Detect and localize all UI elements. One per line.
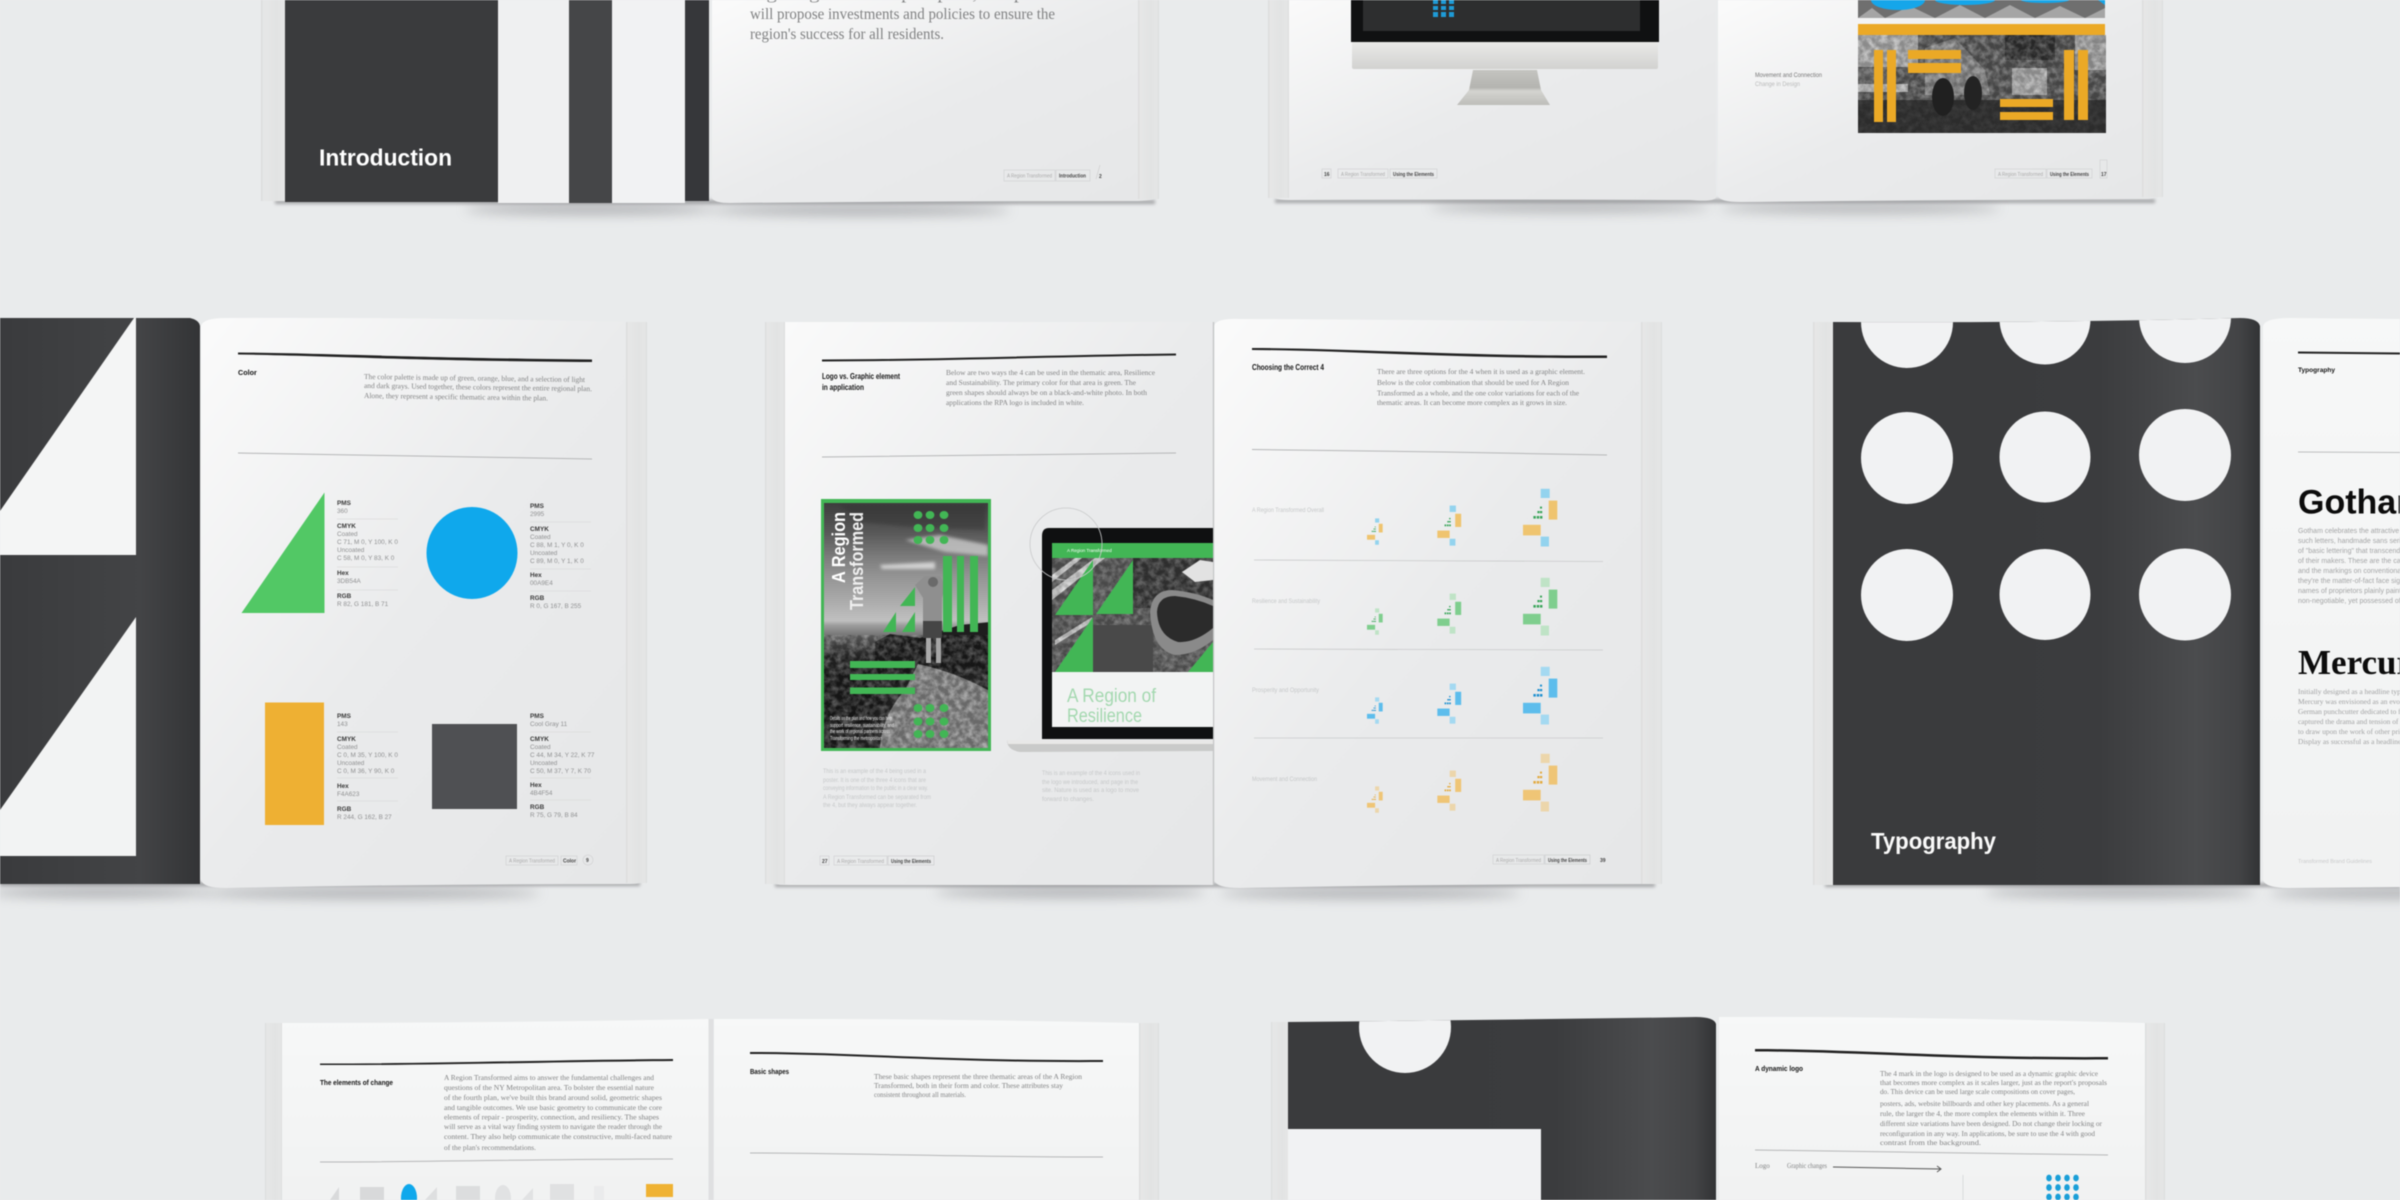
laptop caption bbox=[1042, 770, 1140, 803]
specs: blue: PMS bbox=[530, 503, 545, 510]
page footer bbox=[1004, 165, 1102, 181]
left heading bbox=[822, 372, 900, 392]
left header rule bbox=[822, 354, 1176, 362]
page footer: A Region Transformed bbox=[509, 858, 555, 864]
left page footer: Using the Elements bbox=[891, 859, 931, 865]
specs: green: C 71, M 0, Y 100, K 0 bbox=[337, 539, 398, 546]
specs: blue: Uncoated bbox=[530, 550, 558, 557]
screen title bbox=[1067, 686, 1157, 727]
left page edge bbox=[765, 322, 785, 884]
left heading: Logo vs. Graphic element bbox=[822, 372, 900, 381]
specs: green: Uncoated bbox=[337, 547, 365, 554]
spread: Color (middle left) bbox=[0, 318, 647, 898]
specs: gray: Hex bbox=[530, 782, 542, 789]
spine bbox=[708, 1019, 714, 1200]
specs: blue: R 0, G 167, B 255 bbox=[530, 603, 582, 610]
vertical rule bbox=[1962, 1175, 1964, 1200]
specs: blue: 00A9E4 bbox=[530, 580, 553, 587]
row: Prosperity and Opportunity: Prosperity and Opportunity bbox=[1252, 687, 1320, 694]
basic shapes body text: consistent throughout all materials. bbox=[874, 1090, 966, 1099]
laptop caption: This is an example of the 4 icons used in bbox=[1042, 770, 1140, 777]
heading: The elements of change: The elements of change bbox=[320, 1078, 393, 1087]
poster title: A Region bbox=[829, 512, 849, 583]
typography page content bbox=[2298, 352, 2400, 865]
shape row bbox=[330, 1184, 673, 1200]
specs: green: 360 bbox=[337, 508, 348, 515]
cover circle bbox=[1358, 1020, 1452, 1074]
left page bbox=[765, 322, 1213, 885]
introduction cover with stripes bbox=[285, 0, 709, 203]
poster small copy: support resilience, sustainability, and bbox=[830, 723, 894, 729]
specs: orange: C 0, M 36, Y 90, K 0 bbox=[337, 768, 395, 775]
right page bbox=[1719, 1017, 2165, 1200]
specs: gray: PMS bbox=[530, 713, 545, 720]
screen title: Resilience bbox=[1067, 706, 1142, 727]
poster caption bbox=[823, 768, 931, 809]
row: A Region Transformed Overall bbox=[1252, 489, 1557, 546]
spread: Using the elements (middle centre) bbox=[765, 319, 1662, 898]
laptop caption: the logo we introduced, and page in the bbox=[1042, 779, 1138, 786]
right intro text: Transformed as a whole, and the one color variations for each of the bbox=[1377, 388, 1580, 398]
dynamic logo body text: that becomes more complex as it scales larger, just as the report's proposals bbox=[1880, 1078, 2107, 1087]
page footers: A Region Transformed bbox=[1998, 172, 2043, 178]
right header rule bbox=[750, 1052, 1103, 1062]
specs: orange: Coated bbox=[337, 744, 358, 751]
page edge bbox=[1813, 322, 1835, 885]
intro text: and dark grays. Used together, these colors represent the entire regional plan. bbox=[364, 381, 592, 393]
logo callout circle bbox=[1030, 508, 1102, 580]
specs: orange: Uncoated bbox=[337, 760, 365, 767]
page footers: Using the Elements bbox=[2050, 172, 2089, 178]
specs: green: CMYK bbox=[337, 523, 356, 530]
elements body text: will serve as a vital way finding system to navigate the reader through the bbox=[444, 1122, 663, 1131]
spread: A dynamic logo (bottom right) bbox=[1271, 1016, 2165, 1200]
heading: Color: Color bbox=[238, 368, 257, 377]
right page edge bbox=[1139, 1023, 1159, 1200]
specs: green: C 58, M 0, Y 83, K 0 bbox=[337, 555, 395, 562]
spread: Using the elements, monitor and photo cards (top right) bbox=[1268, 0, 2163, 213]
right page edge bbox=[2145, 1023, 2165, 1200]
poster small copy bbox=[830, 716, 894, 742]
typography page bbox=[2263, 318, 2400, 888]
specs: gray: R 75, G 79, B 84 bbox=[530, 812, 578, 819]
page footers bbox=[1322, 160, 2107, 178]
cover white block bbox=[1288, 1129, 1541, 1200]
spread: Typography (middle right) bbox=[1813, 271, 2400, 898]
dark cover with white triangles bbox=[0, 318, 200, 884]
left intro text: Below are two ways the 4 can be used in the thematic area, Resilience bbox=[946, 368, 1156, 377]
right intro text: thematic areas. It can become more complex as it grows in size. bbox=[1377, 398, 1567, 407]
Gotham description bbox=[2298, 528, 2400, 605]
introduction body text: will propose investments and policies to ensure the bbox=[750, 6, 1055, 23]
specs: gray: C 44, M 34, Y 22, K 77 bbox=[530, 752, 595, 759]
specs: gray: Cool Gray 11 bbox=[530, 721, 568, 728]
left intro text: and Sustainability. The primary color for that area is green. The bbox=[946, 378, 1137, 387]
page edge bbox=[626, 322, 647, 883]
divider bbox=[1755, 1150, 2108, 1155]
right page bbox=[1718, 0, 2163, 202]
intro text: Alone, they represent a specific thematic area within the plan. bbox=[364, 391, 548, 403]
page footer: A Region Transformed bbox=[1007, 174, 1052, 180]
page footers: 16 bbox=[1324, 172, 1330, 178]
laptop mockup bbox=[1007, 528, 1213, 752]
right intro text bbox=[1377, 367, 1585, 407]
specs: gray bbox=[530, 713, 595, 819]
left page footer: 27 bbox=[822, 859, 828, 865]
row: Movement and Connection: Movement and Connection bbox=[1252, 776, 1317, 783]
elements body text: elements of repair - prosperity, connection, and resiliency. The shapes bbox=[444, 1112, 659, 1122]
heading: Introduction: Introduction bbox=[319, 144, 452, 170]
labels bbox=[1755, 1162, 1827, 1170]
specs: gray: Coated bbox=[530, 744, 551, 751]
dynamic logo body text: The 4 mark in the logo is designed to be used as a dynamic graphic device bbox=[1880, 1069, 2099, 1078]
page shadows bbox=[1275, 199, 2155, 213]
specs: blue bbox=[530, 503, 591, 610]
right intro text: Below is the color combination that should be used for A Region bbox=[1377, 378, 1569, 387]
poster caption: This is an example of the 4 being used in a bbox=[823, 768, 926, 775]
specs: orange: C 0, M 35, Y 100, K 0 bbox=[337, 752, 398, 759]
introduction body text bbox=[750, 0, 1055, 43]
page footers: 17 bbox=[2101, 172, 2107, 178]
dynamic logo body text: posters, ads, website billboards and other key placements. As a general bbox=[1880, 1099, 2089, 1108]
right heading: Choosing the Correct 4 bbox=[1252, 363, 1324, 372]
poster mockup bbox=[821, 499, 991, 751]
left page edge bbox=[265, 1023, 282, 1200]
screen logo: A Region Transformed bbox=[1067, 548, 1112, 553]
basic shapes body text: These basic shapes represent the three thematic areas of the A Region bbox=[874, 1072, 1082, 1081]
dynamic logo body text: rule, the larger the 4, the more complex the elements within it. Three bbox=[1880, 1109, 2086, 1118]
heading: Basic shapes: Basic shapes bbox=[750, 1067, 789, 1076]
monitor mockup bbox=[1351, 0, 1659, 105]
elements body text: of the fourth plan, we've built this brand around solid, geometric shapes bbox=[444, 1093, 662, 1102]
labels: Logo bbox=[1755, 1162, 1770, 1170]
specs: blue: C 88, M 1, Y 0, K 0 bbox=[530, 542, 584, 549]
specs: orange: PMS bbox=[337, 713, 352, 720]
specs: blue: Coated bbox=[530, 534, 551, 541]
left page edge bbox=[1271, 1022, 1290, 1200]
poster title: Transformed bbox=[847, 512, 867, 610]
introduction body text: region's success for all residents. bbox=[750, 26, 944, 43]
intro text: The color palette is made up of green, orange, blue, and a selection of light bbox=[364, 372, 586, 384]
specs: gray: Uncoated bbox=[530, 760, 558, 767]
poster caption: poster. It is one of the three 4 icons that are bbox=[823, 777, 926, 784]
poster title bbox=[829, 512, 867, 610]
left page stack bbox=[261, 0, 287, 201]
heading: A dynamic logo: A dynamic logo bbox=[1755, 1064, 1803, 1073]
right divider bbox=[1252, 450, 1607, 455]
right page edge bbox=[1641, 322, 1662, 884]
left page edge bbox=[1268, 0, 1289, 198]
basic shapes body text bbox=[874, 1072, 1082, 1099]
page footer: Transformed Brand Guidelines bbox=[2298, 859, 2373, 865]
laptop caption: forward to changes. bbox=[1042, 796, 1094, 803]
elements body text: of the plan's recommendations. bbox=[444, 1143, 536, 1152]
specs: gray: C 50, M 37, Y 7, K 70 bbox=[530, 768, 591, 775]
poster small copy: the work of regional partners across bbox=[830, 729, 890, 735]
poster small copy: Details on the plan and how you can help bbox=[830, 716, 892, 722]
header rule bbox=[238, 352, 592, 362]
left divider bbox=[822, 453, 1176, 457]
elements body text: questions of the NY Metropolitan area. To bolster the essential nature bbox=[444, 1083, 655, 1092]
laptop caption: site. Nature is used as a logo to move bbox=[1042, 787, 1140, 794]
heading: Typography: Typography bbox=[1871, 828, 1996, 854]
specs: green: RGB bbox=[337, 593, 352, 600]
specs: blue: CMYK bbox=[530, 526, 549, 533]
specs: gray: CMYK bbox=[530, 736, 549, 743]
left header rule bbox=[320, 1059, 673, 1065]
specs: blue: C 89, M 0, Y 1, K 0 bbox=[530, 558, 584, 565]
dynamic logo body text bbox=[1880, 1069, 2107, 1147]
left page bbox=[265, 1019, 709, 1200]
specs: orange: Hex bbox=[337, 783, 349, 790]
introduction text page bbox=[712, 0, 1159, 203]
page footers: A Region Transformed bbox=[1341, 172, 1385, 178]
spread: The elements of change / Basic shapes (bottom left) bbox=[265, 1019, 1159, 1200]
row: A Region Transformed Overall: A Region Transformed Overall bbox=[1252, 507, 1324, 514]
left page footer: A Region Transformed bbox=[837, 859, 884, 865]
specs: blue: 2995 bbox=[530, 511, 545, 518]
intro text bbox=[364, 372, 592, 403]
dark cover bbox=[1288, 1017, 1716, 1200]
caption: Movement and Connection: Movement and Connection bbox=[1755, 73, 1822, 79]
basic shapes body text: Transformed, both in their form and color. These attributes stay bbox=[874, 1081, 1063, 1090]
page edge bbox=[1138, 0, 1159, 199]
specs: green: Coated bbox=[337, 531, 358, 538]
divider bbox=[238, 453, 592, 459]
specs: orange: 143 bbox=[337, 721, 348, 728]
specs: green bbox=[337, 500, 398, 608]
left intro text: applications the RPA logo is included in white. bbox=[946, 398, 1084, 407]
right page edge bbox=[2142, 0, 2163, 197]
specs: blue: RGB bbox=[530, 595, 545, 602]
page footer: 9 bbox=[586, 858, 589, 864]
photo card: blue bbox=[1858, 0, 2105, 18]
row: Resilience and Sustainability bbox=[1252, 578, 1557, 636]
swatch: gray square bbox=[432, 724, 517, 809]
specs: orange: R 244, G 162, B 27 bbox=[337, 814, 392, 821]
right page footer: Using the Elements bbox=[1548, 858, 1587, 864]
swatch: green triangle bbox=[242, 492, 324, 613]
specs: orange bbox=[337, 713, 398, 821]
right page footer bbox=[1493, 855, 1606, 864]
page shadows bbox=[0, 882, 640, 898]
elements body text bbox=[444, 1073, 673, 1152]
elements body text: A Region Transformed aims to answer the fundamental challenges and bbox=[444, 1073, 654, 1082]
spread: Introduction (top left) bbox=[261, 0, 1159, 215]
page shadows bbox=[775, 883, 1655, 898]
color page bbox=[201, 318, 647, 888]
specs: gray: 4B4F54 bbox=[530, 790, 553, 797]
dynamic logo body text: do. This device can be used large scale compositions on cover pages, bbox=[1880, 1087, 2075, 1096]
dynamic logo body text: different size variations have been designed. Do not change their locking or bbox=[1880, 1119, 2102, 1128]
left divider bbox=[320, 1159, 673, 1162]
left intro text: green shapes should always be on a black-and-white photo. In both bbox=[946, 388, 1147, 397]
caption: Movement and Connection bbox=[1755, 73, 1822, 88]
specs: orange: F4A623 bbox=[337, 791, 360, 798]
right page bbox=[714, 1019, 1159, 1200]
poster caption: the 4, but they always appear together. bbox=[823, 802, 917, 809]
dark cover bbox=[1833, 318, 2260, 885]
hiker bbox=[915, 576, 945, 663]
right page bbox=[1214, 319, 1662, 888]
dynamic logo body text: reconfiguration in any way. In applications, be sure to use the 4 with good bbox=[1880, 1129, 2095, 1138]
left page footer bbox=[820, 856, 934, 865]
dynamic logo body text: contrast from the background. bbox=[1880, 1138, 1981, 1147]
labels: Graphic changes bbox=[1787, 1162, 1827, 1170]
specs: orange: CMYK bbox=[337, 736, 356, 743]
circle grid bbox=[1860, 318, 2232, 642]
Mercury description bbox=[2298, 687, 2400, 746]
left heading: in application bbox=[822, 383, 864, 392]
page footers: Using the Elements bbox=[1393, 172, 1434, 178]
specs: green: PMS bbox=[337, 500, 352, 507]
arrow bbox=[1833, 1166, 1941, 1172]
specs: orange: RGB bbox=[337, 806, 352, 813]
right intro text: There are three options for the 4 when it is used as a graphic element. bbox=[1377, 367, 1585, 376]
small heading: Typography bbox=[2298, 367, 2335, 374]
elements body text: and tangible outcomes. We use basic geometry to communicate the core bbox=[444, 1103, 663, 1112]
swatch: orange rectangle bbox=[265, 702, 324, 825]
screen title: A Region of bbox=[1067, 686, 1157, 707]
specs: green: Hex bbox=[337, 570, 349, 577]
right page footer: 39 bbox=[1600, 858, 1606, 864]
specs: green: 3DB54A bbox=[337, 578, 362, 585]
poster small copy: Transforming the metropolitan bbox=[830, 736, 882, 742]
page footer: Color bbox=[563, 858, 576, 864]
row: Movement and Connection bbox=[1252, 754, 1557, 813]
spine bbox=[1212, 322, 1214, 885]
right header rule bbox=[1252, 348, 1607, 358]
caption: Movement and Connection: Change in Design bbox=[1755, 82, 1800, 88]
page footer: Introduction bbox=[1059, 174, 1086, 180]
row: Prosperity and Opportunity bbox=[1252, 667, 1557, 724]
swatch: blue circle bbox=[426, 507, 518, 599]
page shadows bbox=[275, 200, 1155, 215]
page footer: 2 bbox=[1099, 174, 1102, 180]
row: Resilience and Sustainability: Resilience and Sustainability bbox=[1252, 598, 1321, 605]
poster caption: conveying information to the public in a clear way. bbox=[823, 785, 928, 792]
left intro text bbox=[946, 368, 1156, 407]
specs: blue: Hex bbox=[530, 572, 542, 579]
elements body text: content. They also help communicate the constructive, multi-faced nature bbox=[444, 1132, 673, 1141]
photo card: orange bbox=[1858, 24, 2106, 133]
poster caption: A Region Transformed can be separated from bbox=[823, 794, 931, 801]
page shadows bbox=[1825, 883, 2400, 898]
right divider bbox=[750, 1153, 1103, 1157]
blue dot logo bbox=[2046, 1175, 2079, 1200]
page footer bbox=[506, 855, 593, 865]
specs: green: R 82, G 181, B 71 bbox=[337, 601, 389, 608]
left page bbox=[1268, 0, 1716, 201]
header rule bbox=[1755, 1049, 2108, 1060]
specs: gray: RGB bbox=[530, 804, 545, 811]
right page footer: A Region Transformed bbox=[1496, 858, 1541, 864]
